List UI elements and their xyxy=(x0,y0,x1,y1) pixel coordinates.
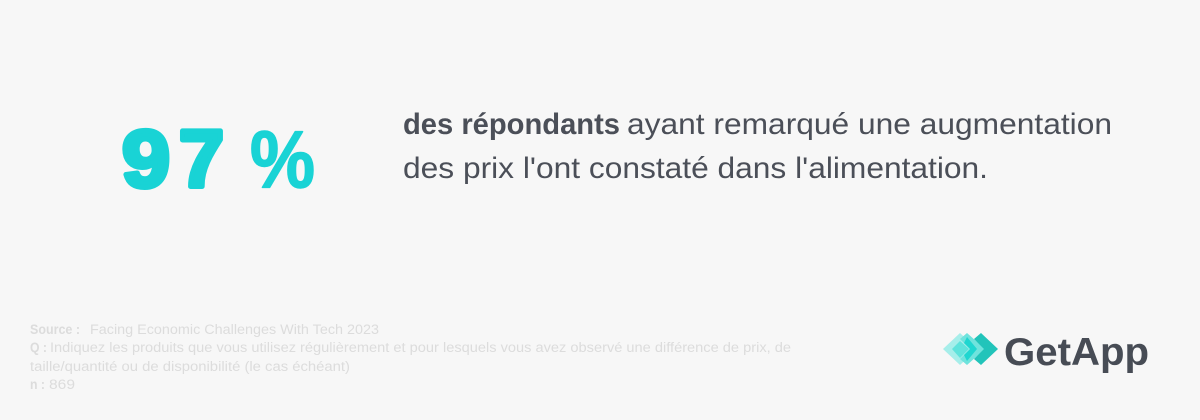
icon: GetApp diamonds xyxy=(943,333,998,365)
wordmark: GetApp: GetApp xyxy=(1004,331,1149,374)
GetApp logo xyxy=(943,331,1149,374)
statement text xyxy=(403,108,1112,185)
source notes: n : xyxy=(30,377,45,392)
source notes: Facing Economic Challenges With Tech 2023 xyxy=(90,322,379,337)
source notes: 869 xyxy=(49,377,75,392)
source notes: Source : xyxy=(30,322,80,337)
source notes: taille/quantité ou de disponibilité (le cas échéant) xyxy=(30,359,350,374)
source notes: Q : xyxy=(30,340,47,355)
source notes xyxy=(30,322,791,392)
headline statistic: 97 % xyxy=(122,114,315,206)
headline statistic: 97 %: 7 xyxy=(179,114,224,204)
statement text: des répondants xyxy=(403,108,620,141)
source notes: Indiquez les produits que vous utilisez régulièrement et pour lesquels vous avez observé une différence de prix, de xyxy=(50,340,791,355)
headline statistic: 97 %: 9 xyxy=(122,114,170,204)
statement text: des prix l'ont constaté dans l'alimentation. xyxy=(403,152,988,185)
statement text: ayant remarqué une augmentation xyxy=(627,108,1112,141)
headline statistic: 97 %: % xyxy=(250,116,315,206)
